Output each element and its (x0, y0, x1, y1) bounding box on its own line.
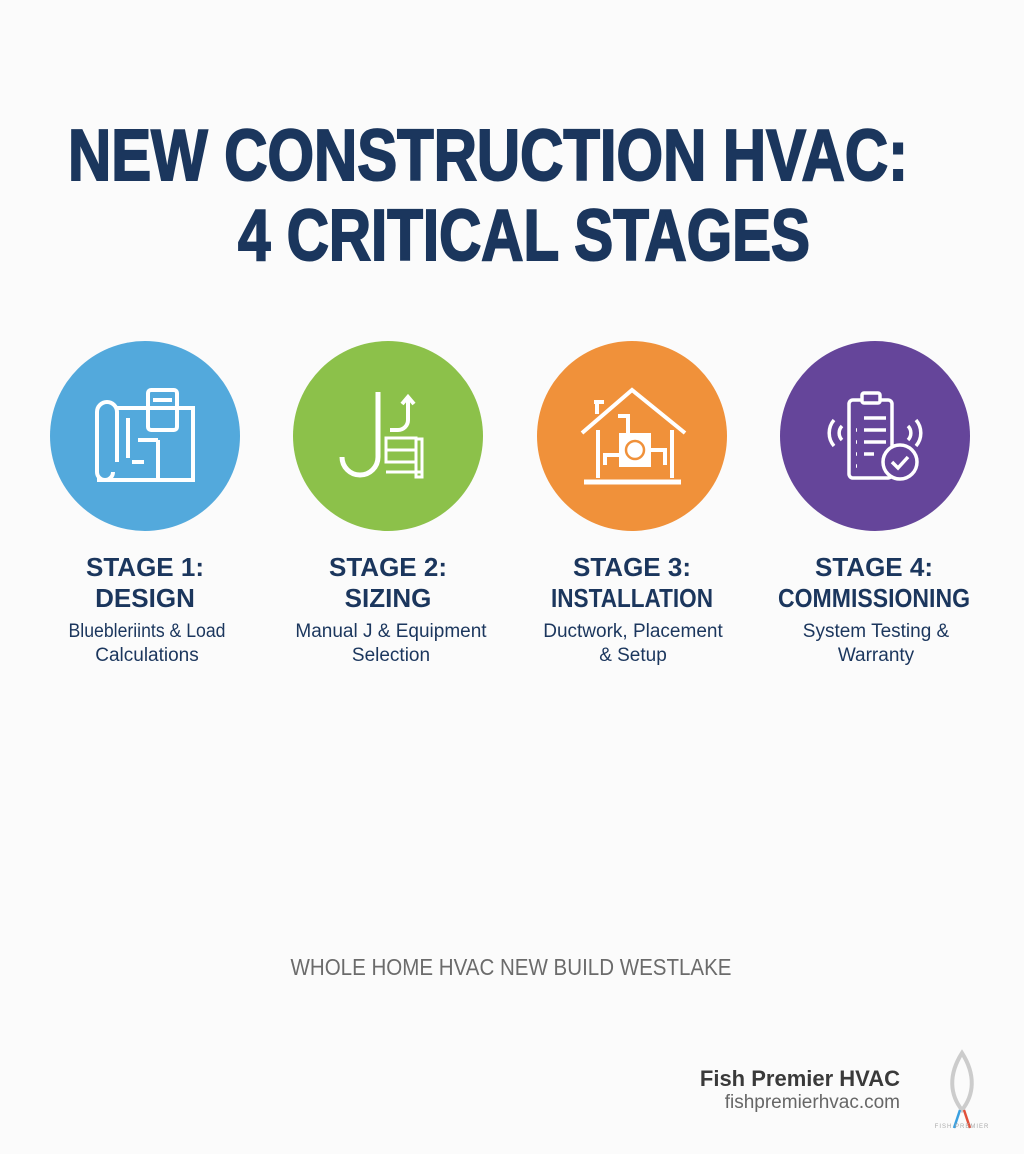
title: 4 CRITICAL STAGES (238, 196, 810, 276)
text (543, 552, 723, 666)
icon: house with HVAC (582, 390, 685, 482)
text: COMMISSIONING (778, 583, 970, 613)
text (295, 552, 487, 666)
logo: FISH PREMIER (935, 1124, 989, 1130)
text: STAGE 3: (573, 552, 691, 582)
text: Manual J & Equipment (295, 621, 487, 642)
text: & Setup (599, 645, 667, 666)
text: INSTALLATION (551, 583, 713, 613)
icon: J and equipment (342, 392, 422, 477)
stage 1: design (50, 341, 240, 666)
text: Warranty (838, 645, 915, 666)
text: SIZING (345, 583, 431, 613)
title (68, 116, 908, 276)
icon: clipboard with check (829, 393, 921, 479)
text: Selection (352, 645, 430, 666)
text: STAGE 2: (329, 552, 447, 582)
text (778, 552, 970, 666)
footer caption: WHOLE HOME HVAC NEW BUILD WESTLAKE (290, 954, 732, 980)
text (68, 552, 226, 666)
icon: blueprint and calculator (97, 390, 193, 480)
text: System Testing & (803, 621, 950, 642)
stage 3: installation (537, 341, 727, 666)
logo (935, 1053, 989, 1130)
stage 4: commissioning (778, 341, 970, 666)
text: Calculations (95, 645, 199, 666)
text: DESIGN (95, 583, 195, 613)
text: STAGE 1: (86, 552, 204, 582)
brand text (700, 1066, 900, 1113)
text: STAGE 4: (815, 552, 933, 582)
text: Bluebleriints & Load (68, 621, 226, 642)
brand text: fishpremierhvac.com (725, 1092, 900, 1113)
brand text: Fish Premier HVAC (700, 1066, 900, 1091)
text: Ductwork, Placement (543, 621, 723, 642)
stage 2: sizing (293, 341, 487, 666)
